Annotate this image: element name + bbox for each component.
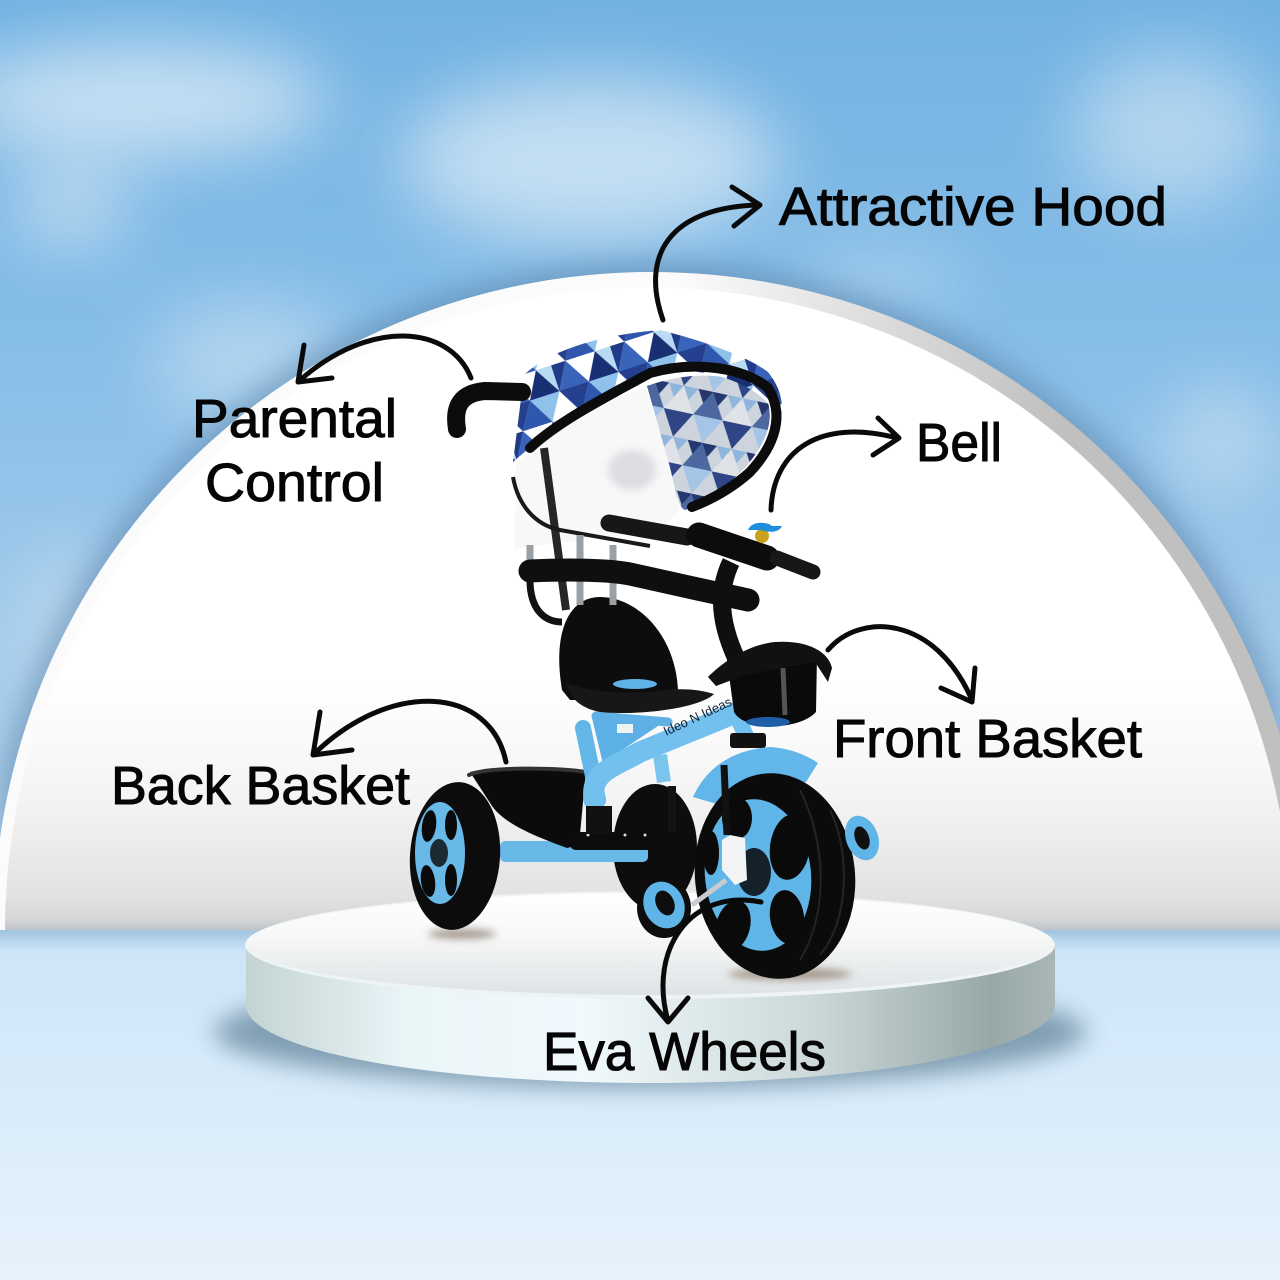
front wheel [685, 765, 865, 987]
parent handle [456, 391, 522, 429]
front basket [708, 642, 832, 727]
callout: attractive hood [656, 177, 1167, 320]
fork clamp [730, 733, 766, 748]
tricycle [405, 330, 885, 987]
far rear wheel [613, 784, 697, 910]
hood inner panel [647, 376, 770, 510]
hood outer fabric [513, 330, 782, 462]
background sky [0, 0, 1280, 930]
callout: parental control [192, 336, 471, 513]
pedals [570, 786, 676, 850]
label: Attractive Hood [779, 177, 1167, 237]
handlebar [609, 523, 813, 572]
training wheels [636, 811, 885, 938]
callout: front basket [828, 627, 1142, 769]
hood [513, 330, 782, 548]
callout: bell [771, 413, 1002, 510]
label [192, 389, 397, 513]
arrow [656, 187, 760, 320]
main frame [583, 712, 746, 800]
front fender [693, 747, 818, 805]
frame brand text: Ideo N Ideas [661, 694, 735, 739]
fork and brake [692, 765, 747, 905]
label: Front Basket [833, 709, 1142, 769]
armrest [530, 570, 748, 622]
wheel shadows [428, 929, 852, 980]
back basket [469, 767, 586, 848]
hood mesh window [515, 388, 680, 548]
left rear wheel [405, 779, 505, 933]
arrow [313, 701, 506, 762]
rear axle tube [500, 841, 648, 862]
seat [559, 597, 714, 713]
arrow [771, 418, 899, 510]
bell [748, 523, 782, 543]
floor [0, 930, 1280, 1280]
arrow [298, 336, 471, 382]
arrow [828, 627, 975, 702]
canopy pole and cable [513, 448, 650, 610]
steering stem [722, 562, 737, 660]
label: Control [205, 453, 384, 513]
callout: eva wheels [543, 900, 826, 1082]
label: Bell [916, 413, 1002, 473]
label: Eva Wheels [543, 1022, 826, 1082]
arrow [648, 900, 761, 1022]
callout: back basket [111, 701, 506, 816]
label: Parental [192, 389, 397, 449]
arch backdrop [0, 262, 1280, 930]
label: Back Basket [111, 756, 410, 816]
hood black edge [530, 367, 776, 507]
podium [214, 891, 1086, 1088]
